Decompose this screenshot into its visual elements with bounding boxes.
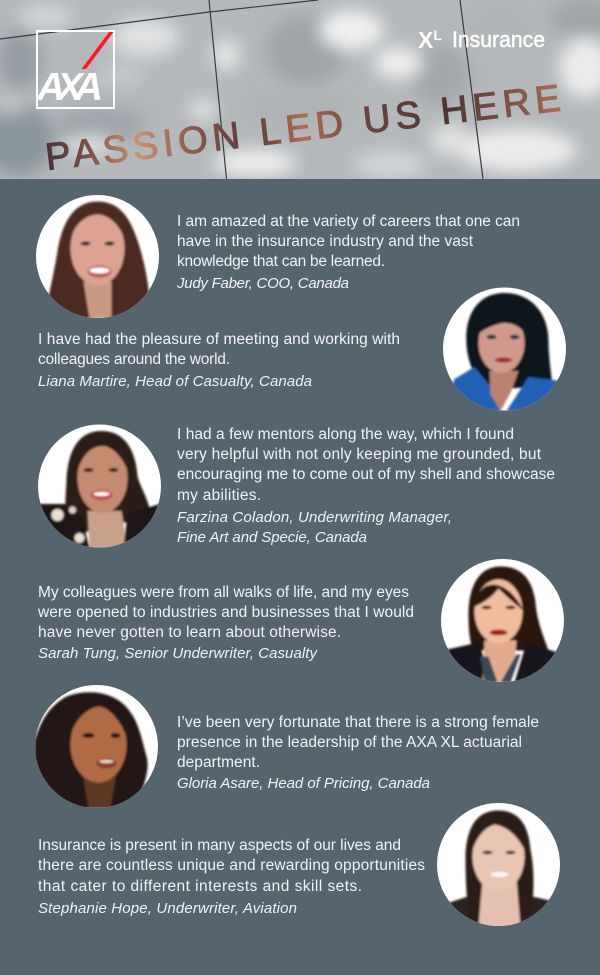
quote: Stephanie Hope: there are countless unique and rewarding opportunities (38, 857, 425, 874)
quote: Farzina Coladon: my abilities. (177, 487, 261, 504)
quote: Judy Faber: knowledge that can be learned. (177, 253, 385, 270)
heading: pavement lettering: PASSION LED US HERE (43, 78, 563, 179)
quote: Sarah Tung: My colleagues were from all walks of life, and my eyes (38, 584, 409, 601)
quote: Sarah Tung: have never gotten to learn about otherwise. (38, 624, 341, 641)
quote: Stephanie Hope (38, 837, 425, 917)
quote: Farzina Coladon: encouraging me to come out of my shell and showcase (177, 466, 555, 483)
quote: Farzina Coladon: Farzina Coladon, Underwriting Manager, (177, 509, 452, 526)
quote: Gloria Asare (177, 714, 539, 792)
icon: XL Insurance logo: X (418, 27, 433, 53)
icon: XL Insurance logo (418, 27, 545, 53)
quote: Sarah Tung: were opened to industries and businesses that I would (37, 604, 414, 621)
portrait: Stephanie Hope (437, 803, 560, 926)
panel: header photo of pavement (0, 0, 600, 179)
quote: Gloria Asare: Gloria Asare, Head of Pricing, Canada (177, 775, 430, 792)
quote: Judy Faber: I am amazed at the variety of careers that one can (177, 213, 520, 230)
quote: Stephanie Hope: Stephanie Hope, Underwriter, Aviation (38, 900, 297, 917)
quote: Gloria Asare: I’ve been very fortunate that there is a strong female (177, 714, 539, 731)
icon: XL Insurance logo: Insurance (452, 27, 545, 52)
quote: Judy Faber (176, 213, 520, 292)
icon: AXA logo: AXA (36, 66, 103, 109)
quote: Liana Martire: Liana Martire, Head of Casualty, Canada (38, 373, 312, 390)
quote: Liana Martire (38, 331, 400, 390)
portrait: Farzina Coladon (38, 424, 162, 548)
portrait: Sarah Tung (440, 559, 564, 682)
quote: Sarah Tung (37, 584, 414, 662)
quote: Stephanie Hope: that cater to different interests and skill sets. (38, 878, 362, 895)
quote: Liana Martire: colleagues around the world. (38, 351, 230, 368)
quote: Sarah Tung: Sarah Tung, Senior Underwriter, Casualty (38, 645, 318, 662)
icon: XL Insurance logo: L (433, 27, 442, 43)
portrait: Gloria Asare (34, 685, 158, 808)
quote: Gloria Asare: presence in the leadership of the AXA XL actuarial (177, 734, 522, 751)
quote: Judy Faber: have in the insurance industry and the vast (177, 233, 474, 250)
quote: Farzina Coladon: very helpful with not only keeping me grounded, but (177, 446, 542, 463)
quote: Stephanie Hope: Insurance is present in many aspects of our lives and (38, 837, 401, 854)
portrait: Judy Faber (36, 195, 159, 318)
portrait: Liana Martire (442, 288, 566, 411)
icon: AXA logo (36, 31, 114, 109)
quote: Farzina Coladon (177, 426, 555, 546)
quote: Judy Faber: Judy Faber, COO, Canada (176, 275, 349, 292)
quote: Liana Martire: I have had the pleasure of meeting and working with (38, 331, 400, 348)
quote: Farzina Coladon: Fine Art and Specie, Canada (177, 529, 367, 546)
quote: Farzina Coladon: I had a few mentors along the way, which I found (177, 426, 514, 443)
quote: Gloria Asare: department. (177, 754, 260, 771)
